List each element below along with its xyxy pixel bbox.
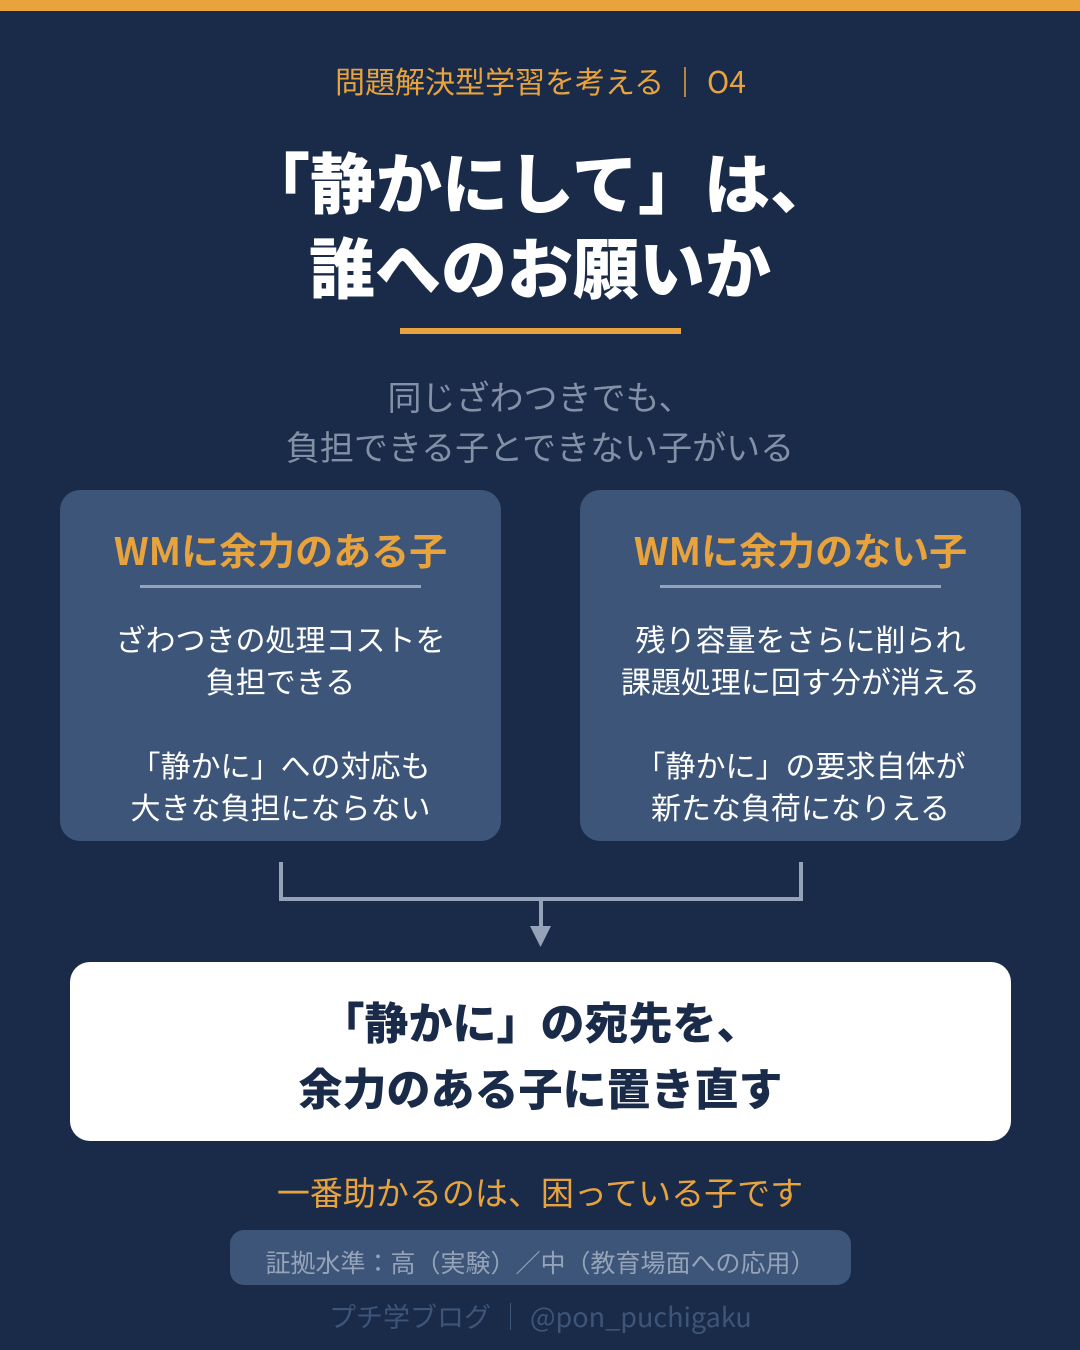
evidence level badge [230, 1230, 851, 1285]
series number: O4 [707, 58, 746, 102]
panel body text: 残り容量をさらに削られ [636, 616, 966, 660]
closing note: 一番助かるのは、困っている子です [277, 1167, 803, 1215]
label separator [684, 67, 686, 97]
subtitle: 同じざわつきでも、 [388, 371, 692, 420]
conclusion text [298, 988, 782, 1118]
panel: conclusion [70, 962, 1011, 1141]
title: 「静かにして」は、 [244, 132, 836, 228]
panel body text: 新たな負荷になりえる [651, 784, 950, 828]
panel: WM without capacity [580, 490, 1021, 841]
panel body text: 「静かに」の要求自体が [636, 742, 966, 786]
evidence text: 証拠水準：高（実験）／中（教育場面への応用） [265, 1244, 816, 1280]
footer brand: プチ学ブログ [329, 1296, 491, 1335]
panel body text: 負担できる [206, 658, 355, 702]
title [244, 132, 836, 313]
arrow: both panels converge to conclusion [279, 862, 803, 947]
panel heading: WMに余力のある子 [114, 521, 447, 576]
conclusion text: 「静かに」の宛先を、 [320, 988, 760, 1052]
subtitle: 負担できる子とできない子がいる [286, 421, 794, 470]
panel: WM with capacity [60, 490, 501, 841]
footer handle: @pon_puchigaku [530, 1296, 752, 1335]
panel body text: 大きな負担にならない [130, 784, 430, 828]
heading divider [140, 585, 421, 588]
panel body text [116, 616, 446, 828]
panel heading: WMに余力のない子 [634, 521, 967, 576]
top accent bar [0, 0, 1080, 11]
panel body text: 課題処理に回す分が消える [621, 658, 980, 702]
title underline [400, 328, 681, 334]
panel body text: 「静かに」への対応も [130, 742, 430, 786]
heading divider [660, 585, 941, 588]
footer separator [510, 1303, 511, 1330]
panel body text: ざわつきの処理コストを [116, 616, 446, 660]
series label: 問題解決型学習を考える [335, 58, 664, 102]
subtitle [286, 371, 794, 470]
conclusion text: 余力のある子に置き直す [298, 1054, 782, 1118]
title: 誰へのお願いか [309, 217, 771, 313]
panel body text [621, 616, 980, 828]
